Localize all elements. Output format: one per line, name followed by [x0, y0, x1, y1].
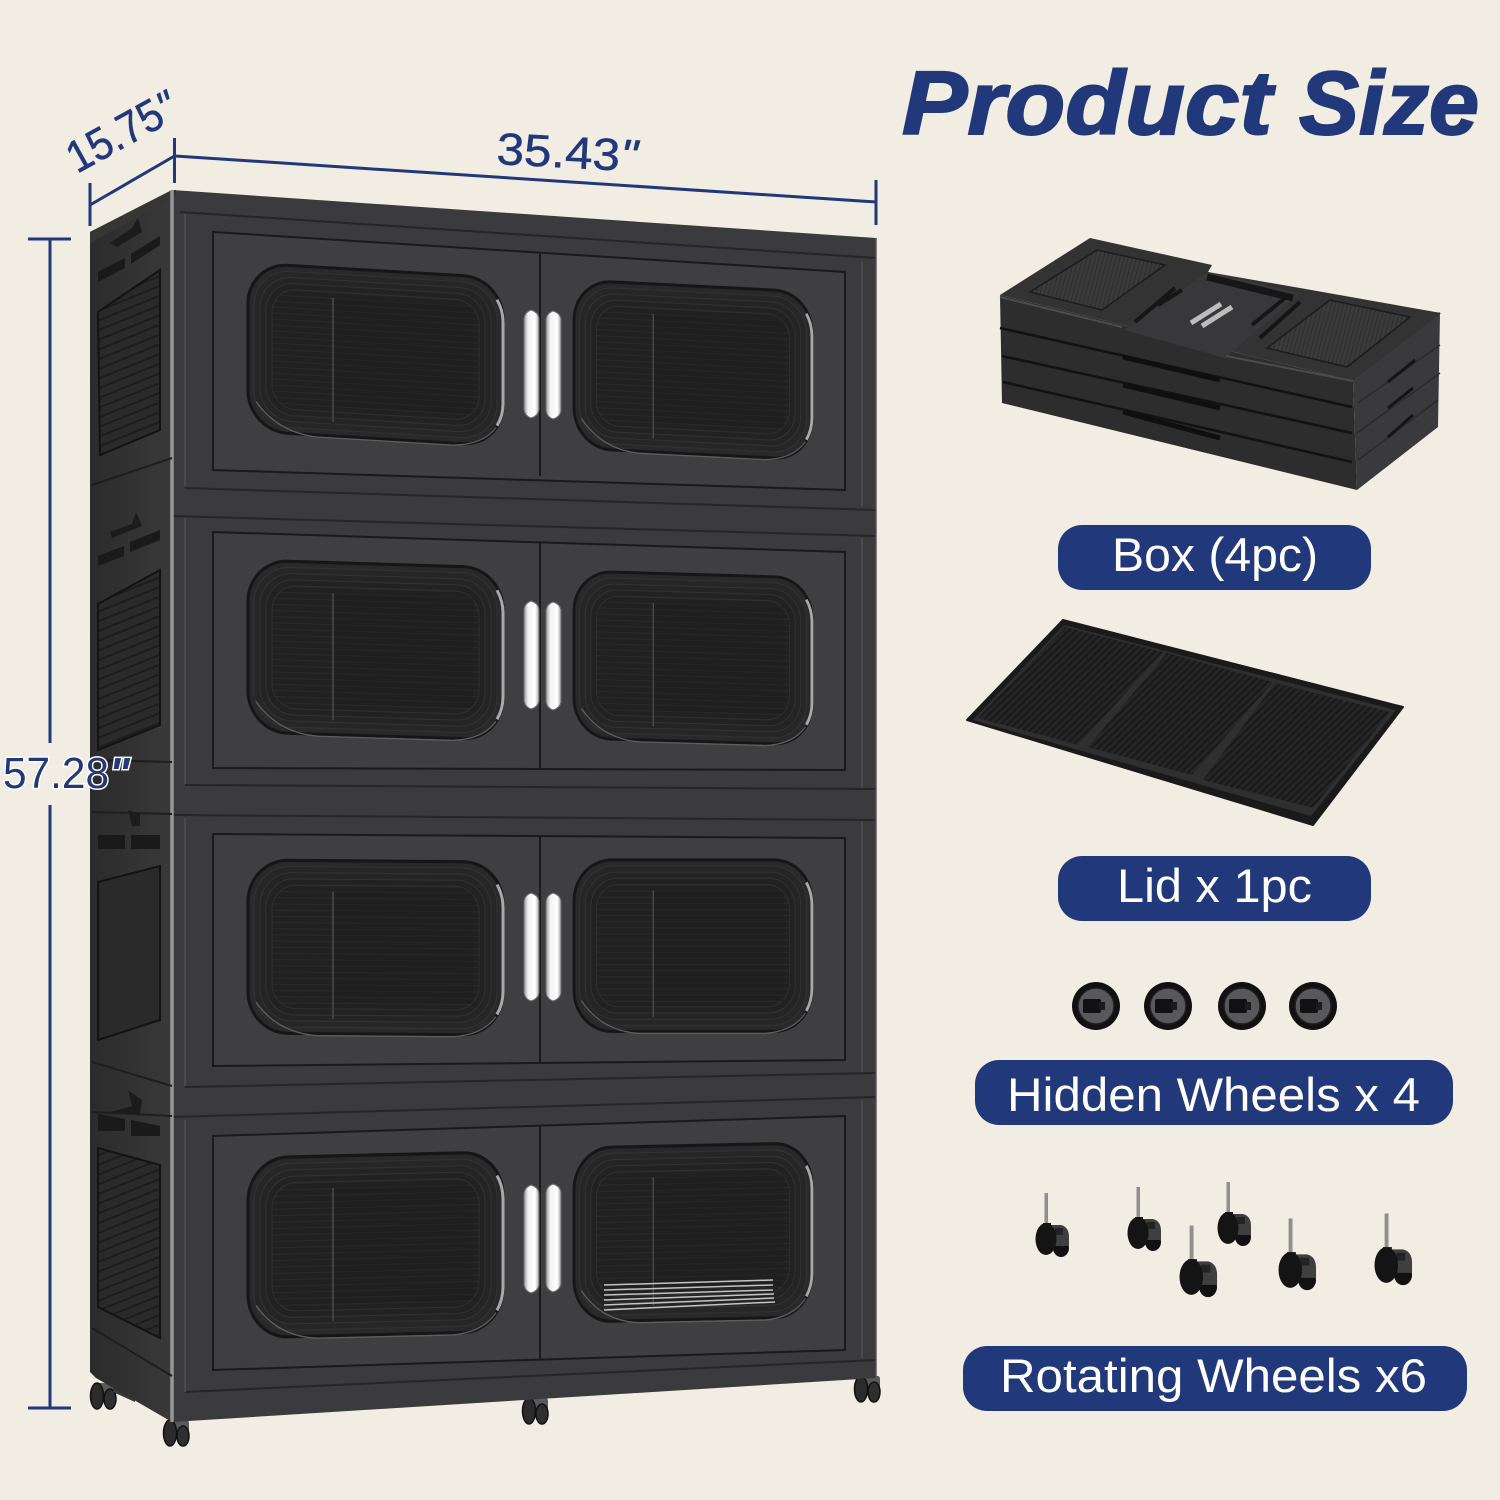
title: Product Size: Size [1299, 54, 1479, 154]
lid panel [967, 620, 1403, 825]
dimension: height 57.28: 57.28 [3, 749, 109, 798]
lid ribbed sections [978, 627, 1390, 808]
folded stack of boxes [1000, 238, 1441, 490]
stack right side [1353, 312, 1440, 490]
pill: Hidden Wheels x 4 [975, 1060, 1453, 1125]
cabinet side face [90, 190, 172, 1422]
side seams [92, 458, 172, 1376]
side panel: slots [98, 236, 160, 1136]
side panel: latches [110, 218, 142, 1114]
pill: Lid x 1pc [1058, 856, 1371, 921]
row 1 door [213, 232, 845, 490]
row 3 door [213, 834, 845, 1066]
pill: Hidden Wheels x 4: Hidden Wheels x 4 [1007, 1068, 1420, 1121]
title: Product Size: Product [902, 54, 1276, 154]
title: Product Size [902, 54, 1479, 154]
dimension: width 35.43 [175, 123, 876, 225]
pill: Lid x 1pc: Lid x 1pc [1117, 859, 1312, 912]
side panel: louvres [98, 218, 160, 1338]
dimension: depth 15.75 [57, 80, 187, 226]
pill: Box (4pc) [1058, 525, 1371, 590]
foot bracket [113, 1384, 135, 1402]
pill: Rotating Wheels x6 [963, 1346, 1467, 1411]
cabinet: four stacked storage boxes [90, 190, 880, 1446]
caster feet [90, 1376, 880, 1446]
pill: Box (4pc): Box (4pc) [1112, 528, 1318, 581]
rotating wheels icons [1036, 1182, 1412, 1297]
layer seams [1000, 328, 1352, 462]
cabinet front face [172, 190, 876, 1422]
front seams [172, 212, 876, 1392]
dimension: height 57.28: " [109, 749, 131, 798]
row 4 door [213, 1116, 845, 1370]
stack top [1000, 238, 1441, 381]
dimension: width 35.43: 35.43" [495, 123, 641, 181]
stack front [1000, 295, 1357, 490]
dimension: depth 15.75: 15.75" [57, 80, 187, 183]
row 2 door [213, 532, 845, 770]
pill: Rotating Wheels x6: Rotating Wheels x6 [1000, 1349, 1427, 1402]
dimension: height 57.28 [3, 239, 131, 1408]
hidden wheels icons [1072, 982, 1337, 1030]
foldaway centre with handles [1124, 272, 1300, 358]
